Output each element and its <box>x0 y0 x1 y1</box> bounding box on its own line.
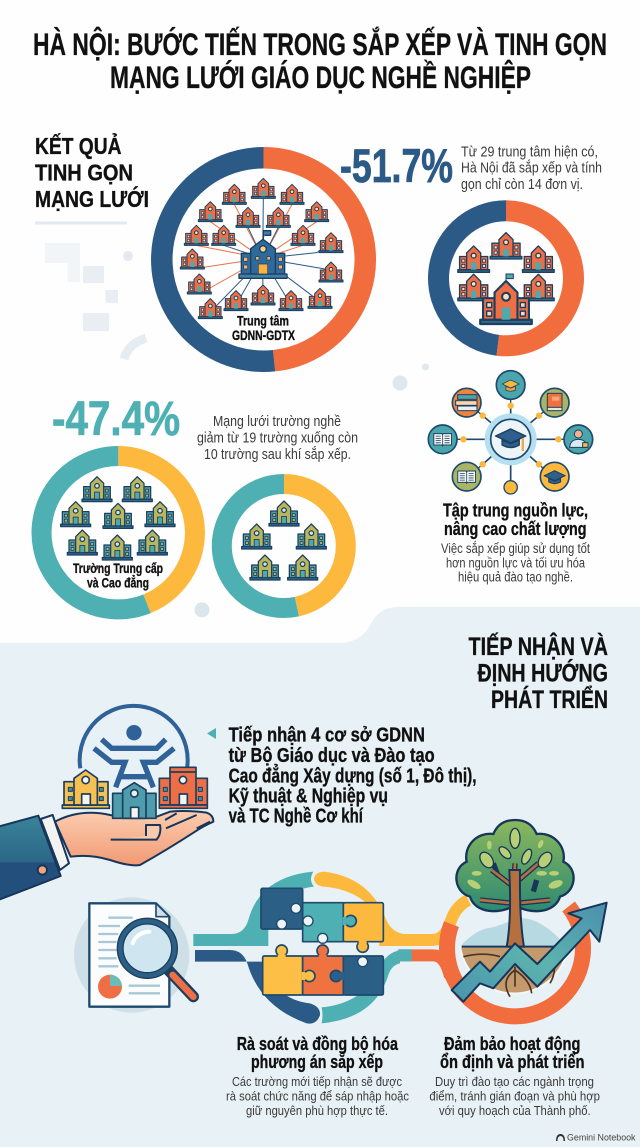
text: focused resources: hiệu quả đào tạo nghề. <box>458 570 573 585</box>
heading: đảm bảo hoạt động: ổn định và phát triển <box>440 1051 584 1072</box>
title <box>33 26 607 95</box>
buildings after merging <box>458 233 554 324</box>
sky and ground <box>460 918 567 947</box>
icon: tree with rising arrow <box>398 820 610 1044</box>
text: 29 to 14 centres: Từ 29 trung tâm hiện có, <box>461 145 598 161</box>
heading: tiếp nhận và định hướng phát triển <box>468 631 608 714</box>
hub diagram: focused resources <box>428 371 593 494</box>
heading: tiếp nhận và định hướng phát triển: PHÁT TRIỂN <box>491 685 608 714</box>
label: trường trung cấp và cao đẳng: Trường Trung cấp <box>73 560 163 576</box>
heading: tiếp nhận và định hướng phát triển: ĐỊNH HƯỚNG <box>478 658 608 688</box>
heading: rà soát và đồng bộ hóa: Rà soát và đồng bộ hóa <box>237 1033 399 1054</box>
heading: rà soát và đồng bộ hóa <box>237 1033 399 1072</box>
donut chart: schools after <box>222 484 346 608</box>
logo arc and figure <box>80 706 188 787</box>
heading: kết quả tinh gọn mạng lưới: KẾT QUẢ <box>35 131 122 159</box>
donut chart: GDNN-GDTX before <box>162 158 365 361</box>
text: stability description <box>429 1074 600 1118</box>
icon: hand holding schools and vocational logo <box>0 706 213 900</box>
text: focused resources: Việc sắp xếp giúp sử dụng tốt <box>441 541 590 556</box>
text: stability description: với quy hoạch của Thành phố. <box>439 1103 591 1118</box>
text: focused resources <box>441 541 590 585</box>
heading: tiếp nhận và định hướng phát triển: TIẾP NHẬN VÀ <box>468 631 608 661</box>
three buildings on palm <box>62 767 207 818</box>
stat: -51.7%: -51.7% <box>340 139 453 192</box>
knob joins <box>278 917 367 980</box>
text: four institutions received: Tiếp nhận 4 cơ sở GDNN <box>229 725 425 747</box>
label: trường trung cấp và cao đẳng: và Cao đẳng <box>87 574 149 591</box>
roots <box>463 953 554 997</box>
label: trung tâm GDNN-GDTX <box>232 314 295 343</box>
network of centres <box>180 178 343 319</box>
text: four institutions received: từ Bộ Giáo dục và Đào tạo <box>229 745 435 767</box>
decorative squares and dots <box>45 243 429 618</box>
central building <box>239 231 287 278</box>
text: 29 to 14 centres: Hà Nội đã sắp xếp và tính <box>461 160 602 177</box>
text: review description: giữ nguyên phù hợp thực tế. <box>246 1103 388 1118</box>
text: four institutions received: và TC Nghề Cơ khí <box>229 806 364 828</box>
text: stability description: Duy trì đào tạo các ngành trọng <box>435 1074 594 1089</box>
text: focused resources: hơn nguồn lực và tối ưu hóa <box>446 556 585 571</box>
text: 29 to 14 centres: gọn chỉ còn 14 đơn vị. <box>461 177 583 193</box>
text: 19 to 10 schools: giảm từ 19 trường xuống còn <box>197 430 358 447</box>
rising arrow <box>452 903 607 1002</box>
text: stability description: điểm, tránh gián đoạn và phù hợp <box>429 1089 600 1104</box>
connector ribbons <box>193 872 403 1024</box>
school buildings before <box>61 477 175 560</box>
icon: document under magnifier <box>74 897 193 1013</box>
donut chart: centres after <box>439 211 574 346</box>
text: four institutions received: Cao đẳng Xây dựng (số 1, Đô thị), <box>229 764 477 788</box>
donut chart: schools before <box>42 456 195 609</box>
school buildings after <box>242 501 326 580</box>
heading: tập trung nguồn lực: Tập trung nguồn lực, <box>443 500 588 521</box>
bullet marker <box>207 728 216 739</box>
puzzle <box>261 888 383 995</box>
connector ring and puzzle pieces <box>193 872 403 1024</box>
text: 19 to 10 schools: Mạng lưới trường nghề <box>213 413 341 430</box>
heading: rà soát và đồng bộ hóa: phương án sắp xếp <box>251 1051 383 1072</box>
heading: kết quả tinh gọn mạng lưới: MẠNG LƯỚI <box>35 185 149 212</box>
heading: đảm bảo hoạt động <box>440 1033 584 1072</box>
text: review description: Các trường mới tiếp nhận sẽ được <box>232 1074 402 1089</box>
footer: gemini notebook: Gemini Notebook <box>567 1133 636 1144</box>
label: trường trung cấp và cao đẳng <box>73 560 163 591</box>
text: 19 to 10 schools <box>197 413 358 463</box>
heading: kết quả tinh gọn mạng lưới: TINH GỌN <box>35 160 133 186</box>
text: 19 to 10 schools: 10 trường sau khí sắp xếp. <box>204 446 351 463</box>
label: trung tâm GDNN-GDTX: GDNN-GDTX <box>232 328 295 343</box>
text: review description <box>226 1074 409 1118</box>
text: four institutions received: Kỹ thuật & Nghiệp vụ <box>229 786 388 808</box>
stat: -47.4%: -47.4% <box>52 393 180 446</box>
label: trung tâm GDNN-GDTX: Trung tâm <box>237 314 289 329</box>
lower section panel <box>0 607 640 1147</box>
trunk and branches <box>480 863 550 903</box>
heading: tập trung nguồn lực: nâng cao chất lượng <box>444 518 586 539</box>
leaves <box>477 828 555 870</box>
heading: kết quả tinh gọn mạng lưới <box>35 131 149 224</box>
text: 29 to 14 centres <box>461 145 602 193</box>
ribbons into ring <box>398 900 468 977</box>
heading: đảm bảo hoạt động: Đảm bảo hoạt động <box>444 1033 580 1054</box>
canopy <box>456 820 574 911</box>
text: review description: rà soát chức năng để sáp nhập hoặc <box>226 1089 409 1104</box>
text: four institutions received <box>229 725 477 828</box>
heading: tập trung nguồn lực <box>443 500 588 539</box>
sleeve and palm <box>0 811 213 900</box>
